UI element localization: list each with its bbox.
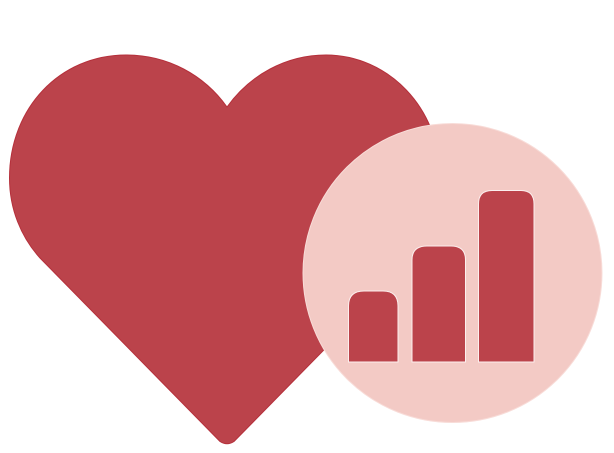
bar 1 bbox=[349, 292, 398, 362]
bar 2 bbox=[412, 246, 465, 362]
bar 3 bbox=[479, 191, 534, 362]
badge background circle bbox=[303, 124, 602, 422]
badge: bar chart circle bbox=[303, 124, 602, 422]
icon: heart bbox=[10, 55, 440, 444]
bar chart bbox=[349, 191, 534, 362]
